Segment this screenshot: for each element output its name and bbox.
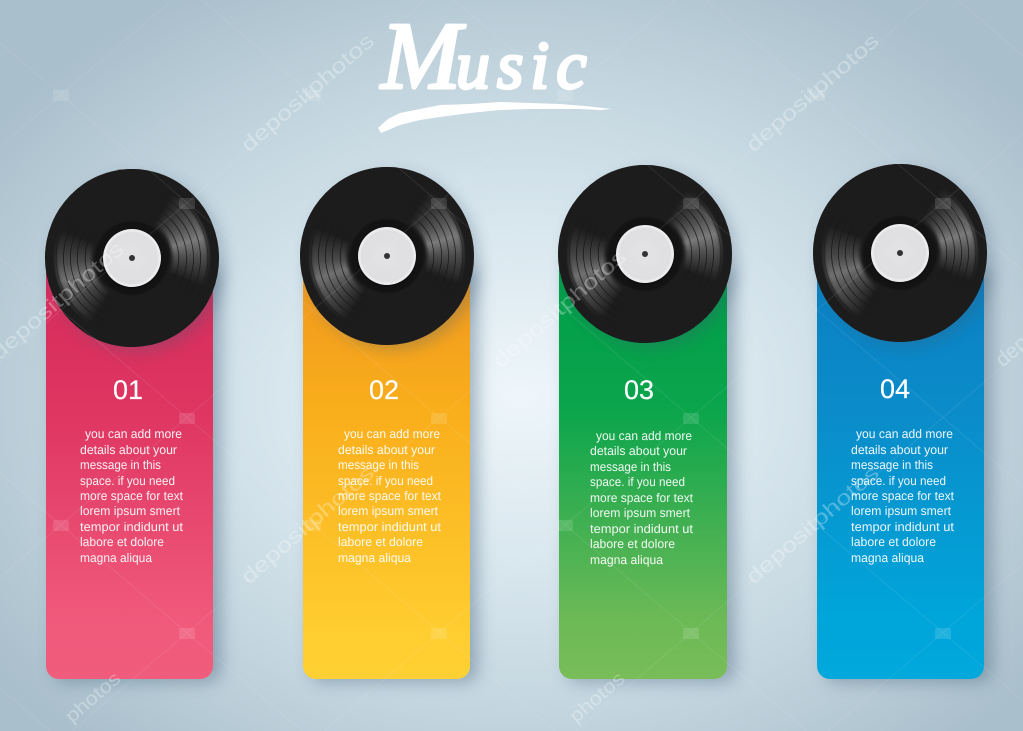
text block 4 xyxy=(851,427,955,565)
vinyl record 4 xyxy=(813,164,987,342)
text block 3: tempor indidunt ut xyxy=(590,522,694,536)
card 1: pink panel xyxy=(46,265,213,679)
text block 2: labore et dolore xyxy=(338,535,423,549)
card 2: orange panel xyxy=(303,265,470,679)
number 02: 02 xyxy=(369,375,399,405)
text block 4: more space for text xyxy=(851,489,954,503)
text block 4: lorem ipsum smert xyxy=(851,504,952,518)
text block 1: lorem ipsum smert xyxy=(80,504,181,518)
text block 3: more space for text xyxy=(590,491,693,505)
text block 2: lorem ipsum smert xyxy=(338,504,439,518)
text block 3: space. if you need xyxy=(590,475,685,489)
watermark text: depositphotos xyxy=(237,29,379,157)
number 04: 04 xyxy=(880,374,910,404)
text block 4: labore et dolore xyxy=(851,535,936,549)
text block 3: labore et dolore xyxy=(590,537,675,551)
text block 3: lorem ipsum smert xyxy=(590,506,691,520)
text block 1: magna aliqua xyxy=(80,551,152,565)
text block 3: details about your xyxy=(590,444,687,458)
text block 2: tempor indidunt ut xyxy=(338,520,442,534)
text block 3 xyxy=(590,429,694,567)
card 4: blue panel xyxy=(817,265,984,679)
text block 2: details about your xyxy=(338,443,435,457)
watermark text: depositphotos xyxy=(489,245,631,373)
text block 4: you can add more xyxy=(856,427,953,441)
watermark text: depositphotos xyxy=(237,461,379,589)
text block 1: you can add more xyxy=(85,427,182,441)
text block 3: magna aliqua xyxy=(590,553,663,567)
text block 2: space. if you need xyxy=(338,474,433,488)
text block 1 xyxy=(80,427,184,565)
text block 4: details about your xyxy=(851,443,948,457)
text block 3: you can add more xyxy=(596,429,692,443)
text block 1: more space for text xyxy=(80,489,183,503)
text block 1: labore et dolore xyxy=(80,535,164,549)
text block 4: message in this xyxy=(851,458,933,472)
text block 1: tempor indidunt ut xyxy=(80,520,184,534)
watermark text: photos xyxy=(566,668,629,727)
card 3: green panel xyxy=(559,265,727,679)
text block 4: magna aliqua xyxy=(851,551,924,565)
vinyl record 1 xyxy=(45,169,219,347)
text block 3: message in this xyxy=(590,460,671,474)
watermark text: depositphotos xyxy=(742,29,884,157)
number 01: 01 xyxy=(113,375,143,405)
title: Music: Music xyxy=(379,2,594,109)
text block 1: details about your xyxy=(80,443,177,457)
number 03: 03 xyxy=(624,375,654,405)
watermark text: photos xyxy=(62,668,125,727)
watermark camera icons xyxy=(53,90,951,639)
text block 4: space. if you need xyxy=(851,474,946,488)
vinyl record 2 xyxy=(300,167,474,345)
watermark text: depositphotos xyxy=(742,461,884,589)
text block 1: message in this xyxy=(80,458,161,472)
vinyl record 3 xyxy=(558,165,732,343)
text block 4: tempor indidunt ut xyxy=(851,520,955,534)
brush stroke underline xyxy=(378,102,612,133)
text block 2: message in this xyxy=(338,458,419,472)
text block 2: more space for text xyxy=(338,489,441,503)
text block 2: magna aliqua xyxy=(338,551,411,565)
text block 2 xyxy=(338,427,442,565)
text block 2: you can add more xyxy=(344,427,440,441)
text block 1: space. if you need xyxy=(80,474,175,488)
